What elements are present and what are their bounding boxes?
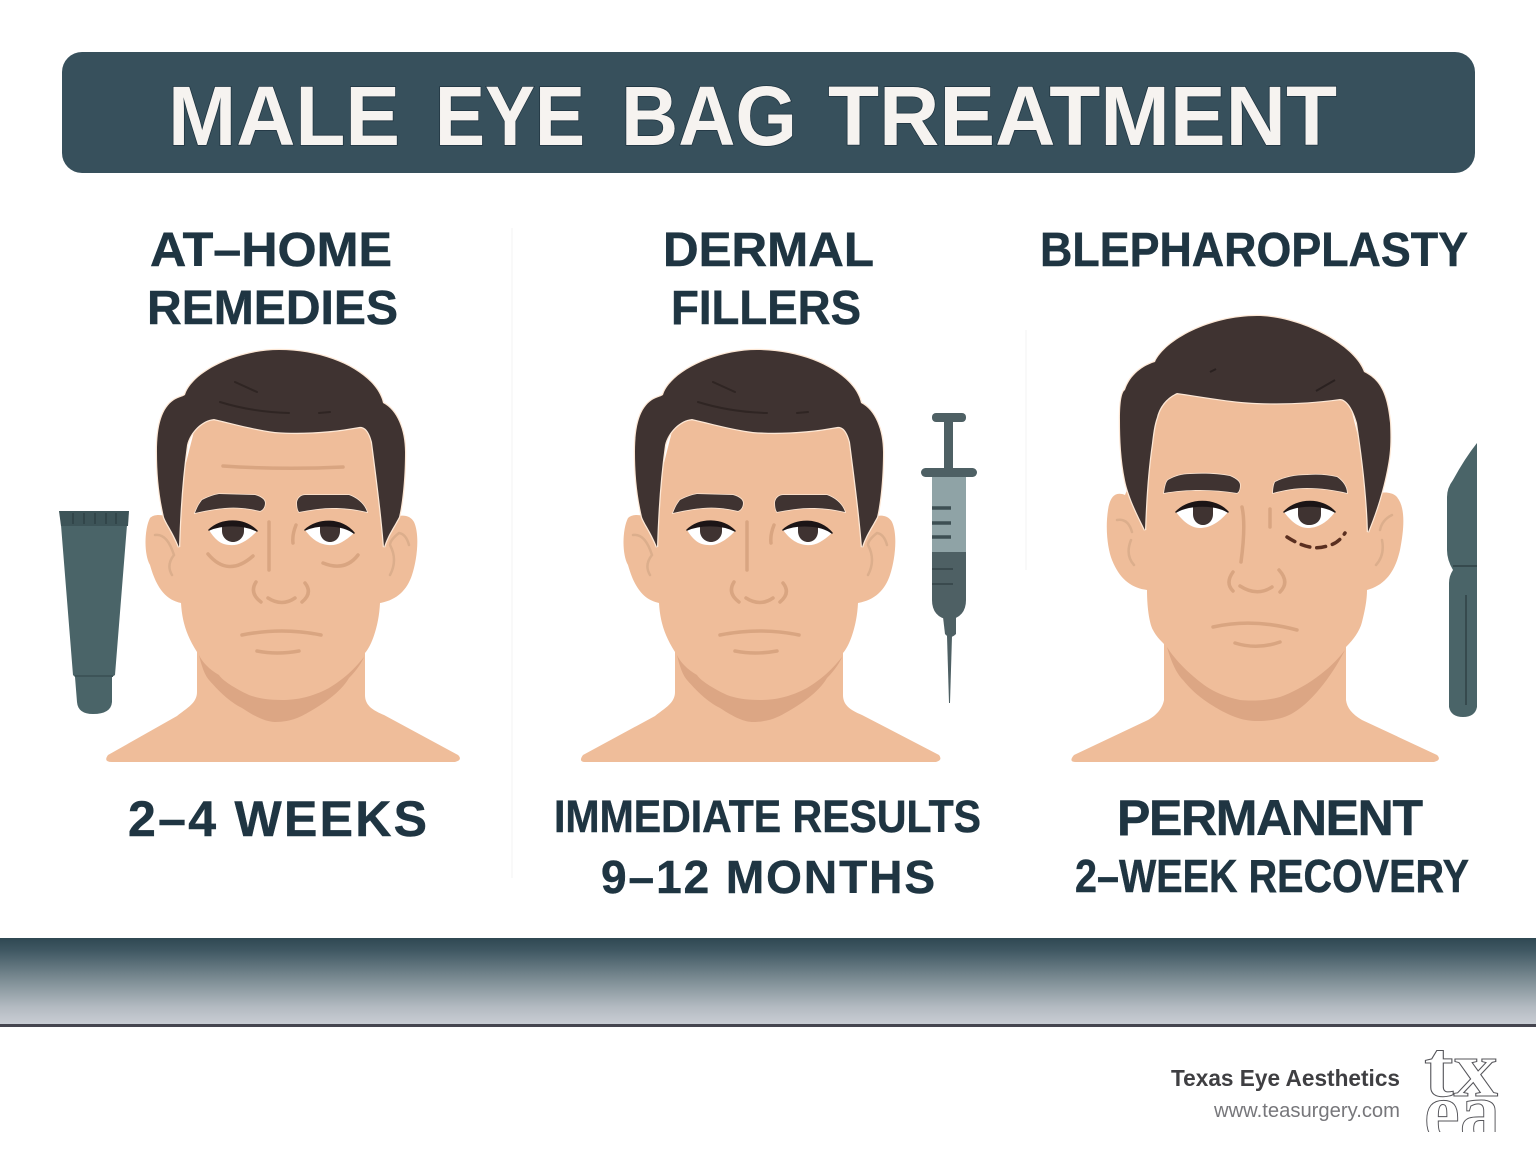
logo: tx: [1424, 1026, 1498, 1114]
icon: cream tube: [59, 511, 129, 714]
heading: at-home remedies: AT–HOME: [150, 224, 392, 277]
icon: syringe: [921, 413, 977, 703]
outcome: immediate results, 9-12 months: 9–12 MONTHS: [601, 851, 935, 903]
gradient footer band: [0, 938, 1536, 1027]
title: MALE: [168, 69, 400, 163]
illustration: man's face, smooth under eyes: [581, 350, 940, 762]
outcome: permanent, 2-week recovery: [1075, 790, 1469, 902]
panel: at-home remedies: [59, 224, 460, 847]
icon: scalpel: [1447, 443, 1477, 717]
title: TREATMENT: [828, 69, 1337, 163]
logo: [1424, 1050, 1498, 1132]
title: [168, 69, 1337, 163]
title: EYE: [435, 69, 585, 163]
footer brand: [1171, 1050, 1498, 1132]
heading: dermal fillers: [663, 224, 874, 335]
title: BAG: [621, 69, 797, 163]
website: www.teasurgery.com: [1213, 1100, 1400, 1122]
brand name: Texas Eye Aesthetics: [1171, 1065, 1400, 1091]
illustration: man's face with incision line: [1071, 316, 1439, 762]
panel: dermal fillers: [554, 224, 981, 903]
outcome: immediate results, 9-12 months: [554, 791, 981, 903]
outcome: permanent, 2-week recovery: PERMANENT: [1117, 790, 1423, 846]
incision marking: [1287, 533, 1345, 548]
heading: dermal fillers: FILLERS: [671, 282, 861, 335]
heading: at-home remedies: [147, 224, 398, 335]
outcome: permanent, 2-week recovery: 2–WEEK RECOVERY: [1075, 850, 1469, 902]
heading: at-home remedies: REMEDIES: [147, 282, 398, 335]
heading: dermal fillers: DERMAL: [663, 224, 874, 277]
title banner: [62, 52, 1475, 173]
illustration: man's face with eye bags: [106, 350, 460, 762]
duration: 2-4 weeks: 2–4 WEEKS: [128, 791, 427, 847]
heading: blepharoplasty: BLEPHAROPLASTY: [1040, 224, 1468, 277]
outcome: immediate results, 9-12 months: IMMEDIATE RESULTS: [554, 791, 981, 842]
panel: blepharoplasty: [1040, 224, 1477, 902]
